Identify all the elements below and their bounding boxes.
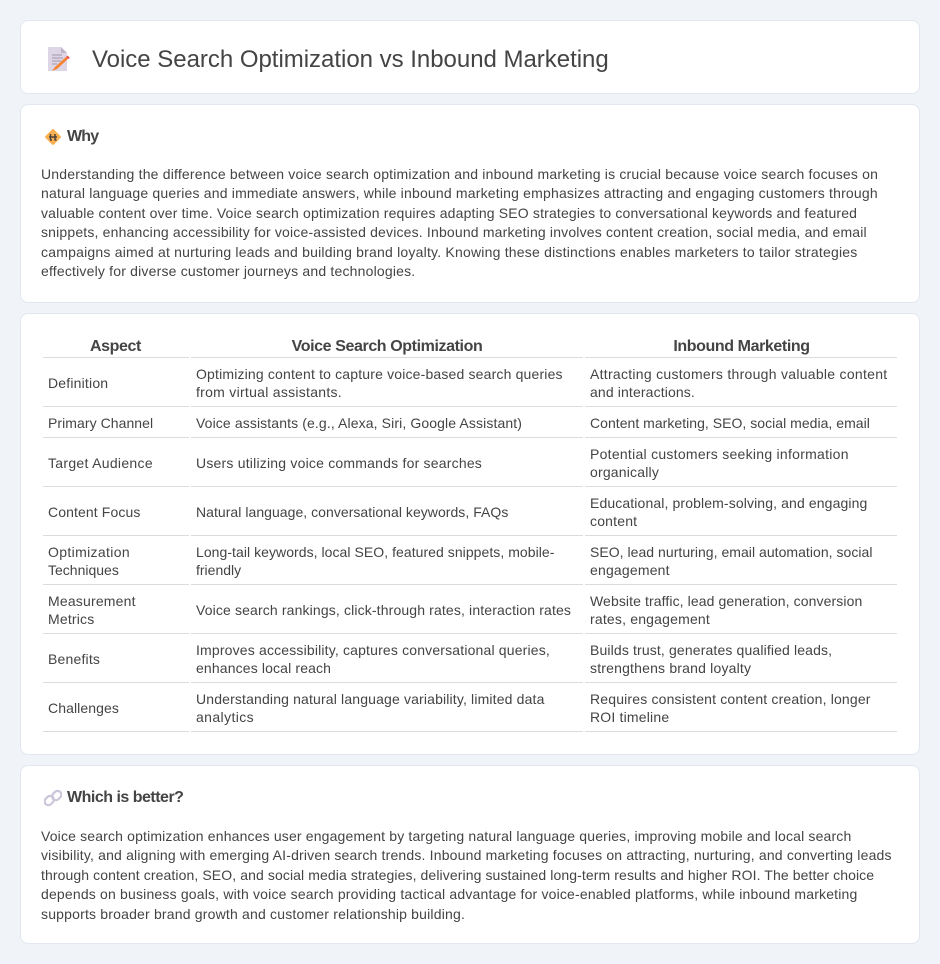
row: content focus: content	[590, 513, 637, 529]
table header: Inbound Marketing	[673, 338, 810, 355]
row: benefits: strengthens brand loyalty	[590, 660, 751, 676]
row: challenges	[43, 691, 897, 732]
row: definition: from virtual assistants.	[196, 384, 342, 400]
row: definition: Optimizing content to capture voice-based search queries	[196, 366, 563, 382]
row: optimization techniques: engagement	[590, 562, 670, 578]
panel: comparison table	[20, 313, 920, 755]
row: measurement metrics: Metrics	[48, 611, 94, 627]
row: definition: Definition	[48, 375, 108, 391]
row: content focus	[43, 495, 897, 536]
row: primary channel: Content marketing, SEO, social media, email	[590, 415, 870, 431]
text block: which is better: through content creation, SEO, and social media strategies, delivering sustained long-term results and higher ROI. The better choice	[41, 867, 874, 883]
row: definition: and interactions.	[590, 384, 695, 400]
row: challenges: ROI timeline	[590, 709, 669, 725]
text block: which is better: Voice search optimization enhances user engagement by targeting natural language queries, improving mobile and local search	[41, 828, 851, 844]
row: definition	[43, 366, 897, 407]
row: content focus: Natural language, conversational keywords, FAQs	[196, 504, 508, 520]
row: optimization techniques: Optimization	[48, 544, 130, 560]
row: challenges: Requires consistent content creation, longer	[590, 691, 871, 707]
text block: why: snippets, enhancing accessibility for voice-assisted devices. Inbound marketing involves content creation, social media, and email	[41, 224, 867, 240]
row: challenges: Understanding natural language variability, limited data	[196, 691, 545, 707]
text block: why	[41, 166, 878, 279]
text block: which is better: visibility, and aligning with emerging AI-driven search trends. Inbound marketing focuses on attracting, nurturing, and converting leads	[41, 847, 892, 863]
row: challenges: analytics	[196, 709, 254, 725]
row: optimization techniques	[43, 544, 897, 585]
title: Voice Search Optimization vs Inbound Marketing	[92, 46, 609, 73]
heading: why: Why	[67, 128, 98, 145]
row: optimization techniques: SEO, lead nurturing, email automation, social	[590, 544, 872, 560]
row: benefits: Builds trust, generates qualified leads,	[590, 642, 832, 658]
heading: which is better: Which is better?	[67, 789, 183, 806]
text block: why: Understanding the difference between voice search optimization and inbound marketing is crucial because voice search focuses on	[41, 166, 878, 182]
row: content focus: Content Focus	[48, 504, 140, 520]
row: measurement metrics: Website traffic, lead generation, conversion	[590, 593, 862, 609]
row: challenges: Challenges	[48, 700, 119, 716]
row: target audience: organically	[590, 464, 659, 480]
panel: which is better	[20, 765, 920, 944]
header card	[20, 20, 920, 94]
text block: why: effectively for diverse customer journeys and technologies.	[41, 263, 415, 279]
row: benefits	[43, 642, 897, 683]
row: primary channel	[43, 415, 897, 438]
row: definition: Attracting customers through valuable content	[590, 366, 887, 382]
row: measurement metrics: rates, engagement	[590, 611, 710, 627]
row: primary channel: Primary Channel	[48, 415, 153, 431]
row: benefits: Improves accessibility, captures conversational queries,	[196, 642, 550, 658]
table header	[43, 338, 897, 358]
row: target audience	[43, 446, 897, 487]
row: optimization techniques: friendly	[196, 562, 241, 578]
icon: chain link	[44, 790, 62, 806]
panel: why	[20, 104, 920, 303]
text block: why: natural language queries and immediate answers, while inbound marketing emphasizes attracting and engaging customers through	[41, 185, 878, 201]
row: content focus: Educational, problem-solving, and engaging	[590, 495, 867, 511]
row: optimization techniques: Long-tail keywords, local SEO, featured snippets, mobile-	[196, 544, 554, 560]
text block: why: valuable content over time. Voice search optimization requires adapting SEO strategies to conversational keywords and featured	[41, 205, 857, 221]
row: benefits: enhances local reach	[196, 660, 331, 676]
row: primary channel: Voice assistants (e.g., Alexa, Siri, Google Assistant)	[196, 415, 522, 431]
table header: Voice Search Optimization	[292, 338, 482, 355]
text block: which is better	[41, 828, 892, 922]
row: target audience: Potential customers seeking information	[590, 446, 849, 462]
row: measurement metrics: Voice search rankings, click-through rates, interaction rates	[196, 602, 571, 618]
icon: warning diamond	[45, 129, 61, 145]
text block: which is better: depends on business goals, with voice search providing tactical advantage for voice-enabled platforms, while inbound marketing	[41, 886, 857, 902]
row: measurement metrics: Measurement	[48, 593, 136, 609]
icon: document with pencil	[48, 47, 70, 71]
row: benefits: Benefits	[48, 651, 100, 667]
text block: why: campaigns aimed at nurturing leads and building brand loyalty. Knowing these distinctions enables marketers to tailor strategies	[41, 244, 858, 260]
table header: Aspect	[90, 338, 141, 355]
text block: which is better: supports broader brand growth and customer relationship building.	[41, 906, 465, 922]
row: target audience: Target Audience	[48, 455, 153, 471]
row: optimization techniques: Techniques	[48, 562, 119, 578]
row: target audience: Users utilizing voice commands for searches	[196, 455, 482, 471]
row: measurement metrics	[43, 593, 897, 634]
